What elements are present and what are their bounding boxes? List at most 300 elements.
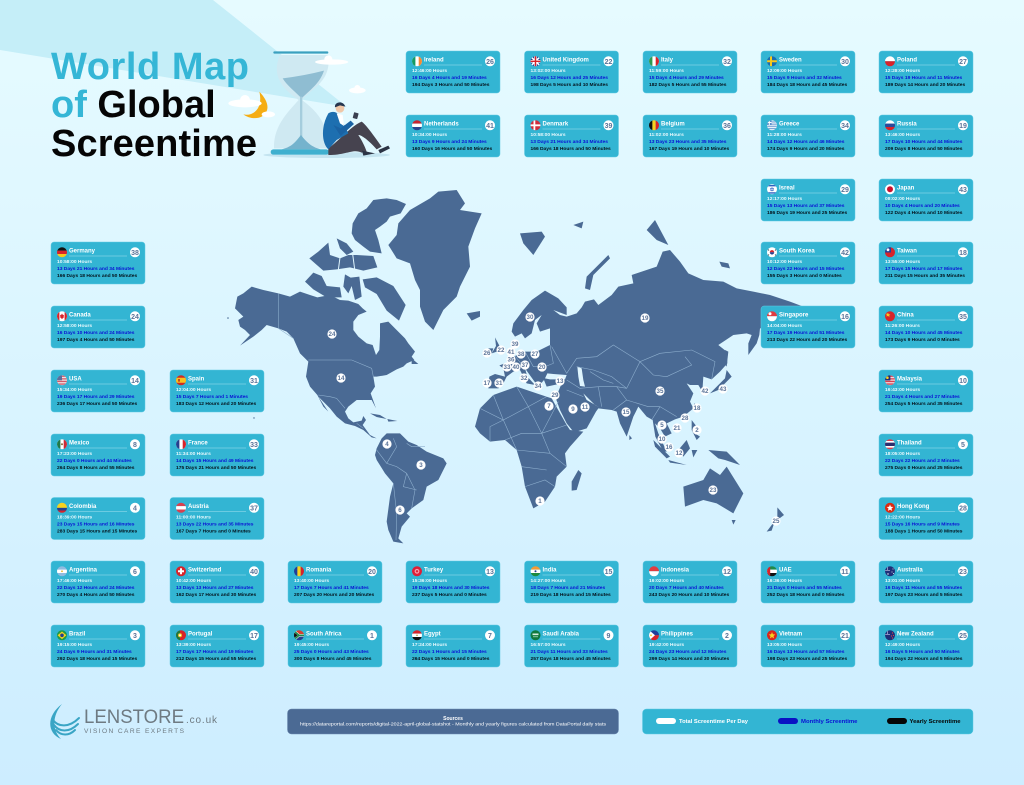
badge: Argentina: 6	[398, 507, 402, 514]
flag: Australia	[885, 566, 895, 577]
card: Denmark: 13 Days 21 Hours and 34 Minutes	[530, 139, 608, 145]
card: Saudi Arabia	[524, 625, 618, 667]
card: Egypt	[406, 625, 500, 667]
card: Philippines	[643, 625, 737, 667]
card: Argentina: 17:46:00 Hours	[57, 578, 92, 584]
card: UAE	[761, 561, 855, 603]
badge: Sweden	[525, 312, 535, 322]
badge: Israel	[550, 390, 560, 400]
flag: Germany	[57, 247, 67, 258]
rank badge: 10: 10	[959, 378, 967, 385]
badge: Indonesia	[674, 448, 684, 458]
badge: India	[621, 407, 631, 417]
card: Germany	[51, 242, 145, 284]
card: Indonesia: 20 Days 7 Hours and 40 Minutes	[649, 585, 724, 591]
card: Australia: 197 Days 23 Hours and 5 Minutes	[885, 592, 963, 598]
card: Greece: 11:28:00 Hours	[767, 132, 802, 138]
card: France	[170, 434, 264, 476]
card: South Korea: 10:12:00 Hours	[767, 259, 802, 265]
badge: UAE: 11	[582, 404, 589, 411]
card: Hong Kong: 15 Days 16 Hours and 9 Minutes	[885, 522, 960, 528]
card: Poland: 15 Days 19 Hours and 11 Minutes	[885, 75, 962, 81]
badge: USA: 14	[338, 375, 345, 382]
badge: Singapore	[664, 442, 674, 452]
badge: Hong Kong	[680, 413, 690, 423]
card: Ireland: 194 Days 3 Hours and 50 Minutes	[412, 82, 490, 88]
card: USA: 15:34:00 Hours	[57, 387, 92, 393]
card: Saudi Arabia: Saudi Arabia	[542, 632, 580, 638]
card: Japan: Japan	[897, 186, 915, 192]
rank badge: 5: 5	[961, 442, 965, 449]
legend item: monthly screentime: Monthly Screentime	[801, 719, 858, 725]
badge: Netherlands: 41	[508, 349, 515, 356]
card: South Korea: South Korea	[779, 248, 815, 254]
card: Italy: Italy	[661, 58, 674, 64]
card: Netherlands	[406, 115, 500, 157]
card: Spain: 183 Days 12 Hours and 20 Minutes	[176, 401, 256, 407]
rank badge: 30: 30	[841, 59, 849, 66]
card: Colombia: 23 Days 15 Hours and 16 Minutes	[57, 522, 135, 528]
card: Singapore: 14:04:00 Hours	[767, 323, 802, 329]
card: New Zealand: 12:49:00 Hours	[885, 642, 920, 648]
flag: Austria	[176, 502, 186, 514]
card: Ireland: 16 Days 4 Hours and 19 Minutes	[412, 75, 487, 81]
badge: Philippines	[692, 425, 702, 435]
card: Switzerland: 162 Days 17 Hours and 30 Minutes	[176, 592, 256, 598]
card: Singapore: Singapore	[779, 312, 809, 318]
flag: Egypt	[412, 630, 422, 641]
card: Japan: 08:02:00 Hours	[885, 196, 920, 202]
badge: China	[655, 386, 665, 396]
rank badge: 24: 24	[131, 314, 139, 321]
card: Vietnam: 13:05:00 Hours	[767, 642, 802, 648]
rank badge: 31: 31	[250, 378, 258, 385]
rank badge: 4: 4	[133, 505, 137, 512]
card: Netherlands: 13 Days 9 Hours and 24 Minutes	[412, 139, 487, 145]
flag: Thailand	[885, 439, 895, 450]
card: United Kingdom: 198 Days 5 Hours and 10 Minutes	[530, 82, 608, 88]
card: Singapore: 17 Days 19 Hours and 51 Minutes	[767, 330, 845, 336]
rank badge: 34: 34	[841, 123, 849, 130]
badge: Vietnam: 21	[674, 425, 681, 432]
rank badge: 16: 16	[841, 314, 849, 321]
title	[51, 46, 257, 165]
badge: UK	[496, 345, 506, 355]
badge: Malaysia	[657, 434, 667, 444]
card: South Korea: 12 Days 22 Hours and 15 Minutes	[767, 266, 845, 272]
badge: Switzerland	[511, 362, 521, 372]
card: Russia: 209 Days 8 Hours and 50 Minutes	[885, 146, 963, 152]
card: Austria	[170, 498, 264, 540]
flag: UAE	[767, 566, 777, 577]
card: Hong Kong: Hong Kong	[897, 504, 930, 510]
card: Netherlands: Netherlands	[424, 122, 459, 128]
badge: South Korea	[700, 386, 710, 396]
card: Romania: 207 Days 20 Hours and 20 Minutes	[294, 592, 374, 598]
card: Spain	[170, 370, 264, 412]
title: of Global	[51, 84, 216, 126]
badge: Romania	[537, 362, 547, 372]
flag: USA	[57, 375, 67, 386]
card: Portugal: 17 Days 17 Hours and 19 Minutes	[176, 649, 254, 655]
card: Indonesia: 16:02:00 Hours	[649, 578, 684, 584]
badge: Russia	[640, 313, 650, 323]
rank badge: 12: 12	[723, 569, 731, 576]
rank badge: 29: 29	[841, 187, 849, 194]
logo: Lenstore	[50, 704, 218, 739]
card: Germany: 13 Days 21 Hours and 34 Minutes	[57, 266, 135, 272]
card: USA: 236 Days 17 Hours and 50 Minutes	[57, 401, 137, 407]
card: Vietnam	[761, 625, 855, 667]
rank badge: 32: 32	[723, 59, 731, 66]
card: Isreal: Isreal	[779, 186, 795, 192]
badge: Switzerland: 40	[513, 364, 520, 371]
flag: Belgium	[649, 120, 659, 131]
card: Indonesia	[643, 561, 737, 603]
card: Philippines: 19:42:00 Hours	[649, 642, 684, 648]
badge: South Africa: 1	[538, 498, 542, 505]
card: Canada	[51, 306, 145, 348]
rank badge: 18: 18	[959, 250, 967, 257]
card: Isreal	[761, 179, 855, 221]
card: Japan: 10 Days 4 Hours and 20 Minutes	[885, 203, 960, 209]
badge: Colombia	[382, 439, 392, 449]
card: Sweden: 12:09:00 Hours	[767, 68, 802, 74]
card: Denmark: Denmark	[542, 122, 569, 128]
card: Russia	[879, 115, 973, 157]
badge: Sweden: 30	[527, 314, 534, 321]
badge: Brazil: 3	[419, 462, 423, 469]
card: Vietnam: Vietnam	[779, 632, 802, 638]
badge: Italy	[519, 373, 529, 383]
card: China: China	[897, 312, 914, 318]
card: Poland: 12:28:00 Hours	[885, 68, 920, 74]
card: South Africa	[288, 625, 382, 667]
card: Netherlands: 160 Days 16 Hours and 50 Minutes	[412, 146, 492, 152]
card: United Kingdom: 16 Days 12 Hours and 25 Minutes	[530, 75, 608, 81]
badge: Argentina	[395, 505, 405, 515]
card: Mexico: Mexico	[69, 440, 90, 446]
card: Argentina: Argentina	[69, 568, 98, 574]
rank badge: 1: 1	[370, 633, 374, 640]
rank badge: 21: 21	[841, 633, 849, 640]
rank badge: 28: 28	[959, 505, 967, 512]
badge: Egypt: 7	[547, 403, 551, 410]
rank badge: 37: 37	[250, 505, 258, 512]
card: United Kingdom	[524, 51, 618, 93]
badge: Singapore: 16	[666, 444, 673, 451]
card: South Korea: 155 Days 3 Hours and 0 Minutes	[767, 273, 842, 279]
flag: Vietnam	[767, 630, 777, 641]
card: Brazil	[51, 625, 145, 667]
flag: Singapore	[767, 311, 777, 322]
card: Turkey: Turkey	[424, 568, 444, 574]
badge: Canada	[327, 329, 337, 339]
card: Isreal: 15 Days 13 Hours and 37 Minutes	[767, 203, 845, 209]
badge: Turkey	[555, 376, 565, 386]
card: Russia: Russia	[897, 122, 917, 128]
card: USA: 19 Days 17 Hours and 29 Minutes	[57, 394, 135, 400]
rank badge: 3: 3	[133, 633, 137, 640]
card: Greece: Greece	[779, 122, 800, 128]
flag: Colombia	[57, 502, 67, 514]
rank badge: 15: 15	[605, 569, 612, 576]
card: Hong Kong: 12:22:00 Hours	[885, 514, 920, 520]
card: Mexico: 264 Days 8 Hours and 55 Minutes	[57, 465, 135, 471]
card: Egypt: Egypt	[424, 632, 441, 638]
card: Spain: 12:04:00 Hours	[176, 387, 211, 393]
card: Egypt: 22 Days 1 Hours and 15 Minutes	[412, 649, 487, 655]
card: Ireland: Ireland	[424, 58, 444, 64]
flag: Portugal	[176, 630, 186, 641]
card: Taiwan: 211 Days 15 Hours and 35 Minutes	[885, 273, 965, 279]
card: United Kingdom: 13:02:00 Hours	[530, 68, 566, 74]
badge: Saudi Arabia	[568, 404, 578, 414]
badge: Thailand: 5	[660, 422, 664, 429]
badge: Poland	[530, 349, 540, 359]
card: Vietnam: 198 Days 23 Hours and 25 Minutes	[767, 656, 847, 662]
card: Colombia: Colombia	[69, 504, 97, 510]
badge: South Africa	[535, 496, 545, 506]
flag: Israel	[767, 184, 777, 195]
card: Turkey: 237 Days 5 Hours and 0 Minutes	[412, 592, 487, 598]
card: Romania	[288, 561, 382, 603]
flag: India	[530, 566, 540, 577]
icon: logo swoosh	[50, 704, 79, 739]
badge: Vietnam	[672, 423, 682, 433]
badge: Poland: 27	[532, 351, 539, 358]
badge: Russia: 19	[642, 315, 649, 322]
card: Malaysia: 21 Days 4 Hours and 27 Minutes	[885, 394, 960, 400]
card: South Africa: 300 Days 8 Hours and 45 Minutes	[294, 656, 372, 662]
card: Thailand: Thailand	[897, 440, 922, 446]
card: China: 11:26:00 Hours	[885, 323, 920, 329]
badge: Greece	[533, 381, 543, 391]
card: Poland: Poland	[897, 58, 917, 64]
card: South Korea	[761, 242, 855, 284]
badge: Greece: 34	[535, 383, 542, 390]
badge: UAE	[580, 402, 590, 412]
card: USA: USA	[69, 376, 82, 382]
card: Taiwan: 13:55:00 Hours	[885, 259, 920, 265]
card: Brazil: 24 Days 9 Hours and 31 Minutes	[57, 649, 132, 655]
logo: Lenstore: .co.uk	[186, 715, 218, 726]
card: Australia: 16 Days 11 Hours and 55 Minutes	[885, 585, 962, 591]
badge: Portugal: 17	[484, 380, 491, 387]
badge: Austria: 37	[522, 362, 529, 369]
flag: Switzerland	[176, 566, 186, 577]
card: New Zealand	[879, 625, 973, 667]
badge: Taiwan: 18	[694, 405, 701, 412]
card: Greece: 174 Days 9 Hours and 20 Minutes	[767, 146, 845, 152]
map: small islands	[227, 317, 255, 419]
badge: Australia: 23	[710, 487, 717, 494]
card: UAE: 252 Days 18 Hours and 0 Minutes	[767, 592, 845, 598]
card: Canada: 16 Days 10 Hours and 24 Minutes	[57, 330, 135, 336]
rank badge: 8: 8	[133, 442, 137, 449]
card: Taiwan: Taiwan	[897, 248, 917, 254]
card: Singapore: 213 Days 22 Hours and 20 Minutes	[767, 337, 847, 343]
card: Portugal: 13:39:00 Hours	[176, 642, 211, 648]
card: New Zealand: New Zealand	[897, 632, 934, 638]
card: China: 14 Days 10 Hours and 45 Minutes	[885, 330, 963, 336]
card: Indonesia: Indonesia	[661, 568, 690, 574]
card: South Africa: South Africa	[306, 632, 342, 638]
rank badge: 26: 26	[486, 59, 494, 66]
card: Argentina: 22 Days 12 Hours and 24 Minutes	[57, 585, 135, 591]
flag: Denmark	[530, 120, 540, 131]
legend box	[642, 709, 973, 734]
card: Ireland	[406, 51, 500, 93]
flag: Taiwan	[885, 247, 895, 258]
logo: Lenstore: LENSTORE	[84, 707, 184, 728]
rank badge: 17: 17	[250, 633, 258, 640]
card: Saudi Arabia: 257 Days 18 Hours and 45 Minutes	[530, 656, 611, 662]
card: Turkey: 15:36:00 Hours	[412, 578, 447, 584]
card: Argentina: 270 Days 4 Hours and 50 Minutes	[57, 592, 135, 598]
card: Romania: 17 Days 7 Hours and 41 Minutes	[294, 585, 369, 591]
illustration: hourglass, moon, clouds and person on phone	[228, 51, 390, 158]
card: China: 173 Days 9 Hours and 0 Minutes	[885, 337, 960, 343]
card: Philippines: Philippines	[661, 632, 694, 638]
badge: Japan	[718, 384, 728, 394]
card: Mexico	[51, 434, 145, 476]
flag: Spain	[176, 375, 186, 386]
flag: Philippines	[649, 630, 659, 641]
card: France: France	[188, 440, 208, 446]
card: Philippines: 299 Days 14 Hours and 30 Minutes	[649, 656, 729, 662]
card: Poland: 189 Days 14 Hours and 20 Minutes	[885, 82, 965, 88]
badge: USA	[336, 373, 346, 383]
badge: India: 15	[623, 409, 630, 416]
card: Philippines: 24 Days 23 Hours and 12 Minutes	[649, 649, 727, 655]
card: Ireland: 12:46:00 Hours	[412, 68, 447, 74]
card: Mexico: 22 Days 0 Hours and 44 Minutes	[57, 458, 132, 464]
card: Colombia: 18:39:00 Hours	[57, 514, 92, 520]
rank badge: 39: 39	[605, 123, 612, 130]
card: Austria: 167 Days 7 Hours and 0 Minutes	[176, 528, 251, 534]
card: Thailand: 275 Days 0 Hours and 25 Minutes	[885, 465, 963, 471]
badge: Spain: 31	[496, 380, 503, 387]
flag: South Africa	[294, 630, 304, 641]
badge: New Zealand	[771, 516, 781, 526]
card: Hong Kong: 188 Days 1 Hours and 50 Minutes	[885, 528, 963, 534]
flag: Japan	[885, 184, 895, 195]
card: Belgium: 13 Days 23 Hours and 35 Minutes	[649, 139, 727, 145]
badge: New Zealand: 25	[773, 518, 780, 525]
rank badge: 11: 11	[841, 569, 849, 576]
card: India: India	[542, 568, 557, 574]
map: Eurasia, Africa and Oceania	[475, 220, 803, 532]
card: Turkey: 19 Days 18 Hours and 30 Minutes	[412, 585, 490, 591]
rank badge: 35: 35	[959, 314, 967, 321]
card: Denmark: 166 Days 18 Hours and 50 Minutes	[530, 146, 611, 152]
badge: Malaysia: 10	[659, 436, 666, 443]
rank badge: 33: 33	[250, 442, 258, 449]
card: Japan: 122 Days 4 Hours and 10 Minutes	[885, 210, 963, 216]
badge: Thailand	[657, 420, 667, 430]
card: Malaysia: Malaysia	[897, 376, 923, 382]
card: UAE: 21 Days 0 Hours and 55 Minutes	[767, 585, 842, 591]
card: Isreal: 186 Days 19 Hours and 25 Minutes	[767, 210, 847, 216]
badge: Israel: 29	[552, 392, 559, 399]
card: Thailand: 22 Days 22 Hours and 2 Minutes	[885, 458, 960, 464]
badge: Portugal	[482, 378, 492, 388]
card: Thailand	[879, 434, 973, 476]
card: Germany: 10:58:00 Hours	[57, 259, 92, 265]
card: Brazil: 19:15:00 Hours	[57, 642, 92, 648]
badge: Austria	[520, 360, 530, 370]
title: World Map	[51, 46, 249, 88]
card: Switzerland: 13 Days 13 Hours and 27 Minutes	[176, 585, 254, 591]
card: Singapore	[761, 306, 855, 348]
card: Italy: 15 Days 4 Hours and 29 Minutes	[649, 75, 724, 81]
card: Portugal: Portugal	[188, 632, 213, 638]
card: Saudi Arabia: 21 Days 11 Hours and 33 Minutes	[530, 649, 608, 655]
rank badge: 6: 6	[133, 569, 137, 576]
rank badge: 38: 38	[131, 250, 139, 257]
flag: Indonesia	[649, 566, 659, 577]
flag: United Kingdom	[530, 56, 540, 67]
card: Austria: Austria	[188, 504, 209, 510]
flag: New Zealand	[885, 630, 895, 641]
card: Argentina	[51, 561, 145, 603]
flag: Italy	[649, 56, 659, 67]
badge: Turkey: 13	[557, 378, 564, 385]
card: Austria: 13 Days 22 Hours and 35 Minutes	[176, 522, 254, 528]
flag: Russia	[885, 120, 895, 131]
flag: China	[885, 311, 895, 322]
flag: Poland	[885, 56, 895, 67]
badge: Saudi Arabia: 9	[571, 406, 575, 413]
flag: Malaysia	[885, 375, 895, 386]
card: Sweden	[761, 51, 855, 93]
rank badge: 40: 40	[250, 569, 258, 576]
card: Indonesia: 243 Days 20 Hours and 10 Minutes	[649, 592, 729, 598]
badge: Taiwan	[692, 403, 702, 413]
card: Russia: 13:46:00 Hours	[885, 132, 920, 138]
card: Canada: Canada	[69, 312, 91, 318]
badge: France	[502, 362, 512, 372]
sources box	[288, 709, 618, 734]
card: Italy: 11:59:00 Hours	[649, 68, 684, 74]
card: India: 219 Days 18 Hours and 15 Minutes	[530, 592, 611, 598]
card: Hong Kong	[879, 498, 973, 540]
legend item: yearly screentime: Yearly Screentime	[910, 719, 961, 725]
card: Australia: Australia	[897, 568, 923, 574]
card: Greece: 14 Days 12 Hours and 46 Minutes	[767, 139, 845, 145]
card: Thailand: 18:05:00 Hours	[885, 451, 920, 457]
card: Belgium: 11:02:00 Hours	[649, 132, 684, 138]
flag: Saudi Arabia	[530, 630, 540, 641]
card: Belgium	[643, 115, 737, 157]
card: Italy	[643, 51, 737, 93]
card: Romania: Romania	[306, 568, 332, 574]
card: South Africa: 25 Days 0 Hours and 43 Minutes	[294, 649, 369, 655]
sources box: Sources	[443, 716, 463, 722]
card: Portugal: 212 Days 15 Hours and 55 Minutes	[176, 656, 256, 662]
rank badge: 36: 36	[723, 123, 731, 130]
badge: Denmark: 39	[512, 341, 519, 348]
card: Denmark	[524, 115, 618, 157]
card: Vietnam: 16 Days 13 Hours and 57 Minutes	[767, 649, 845, 655]
legend item: total screentime per day: Total Screentime Per Day	[679, 719, 748, 725]
world map	[227, 190, 803, 543]
card: New Zealand: 16 Days 5 Hours and 50 Minutes	[885, 649, 960, 655]
legend item: monthly screentime	[778, 718, 858, 725]
rank badge: 9: 9	[607, 633, 611, 640]
map: Americas and Greenland	[235, 190, 482, 543]
